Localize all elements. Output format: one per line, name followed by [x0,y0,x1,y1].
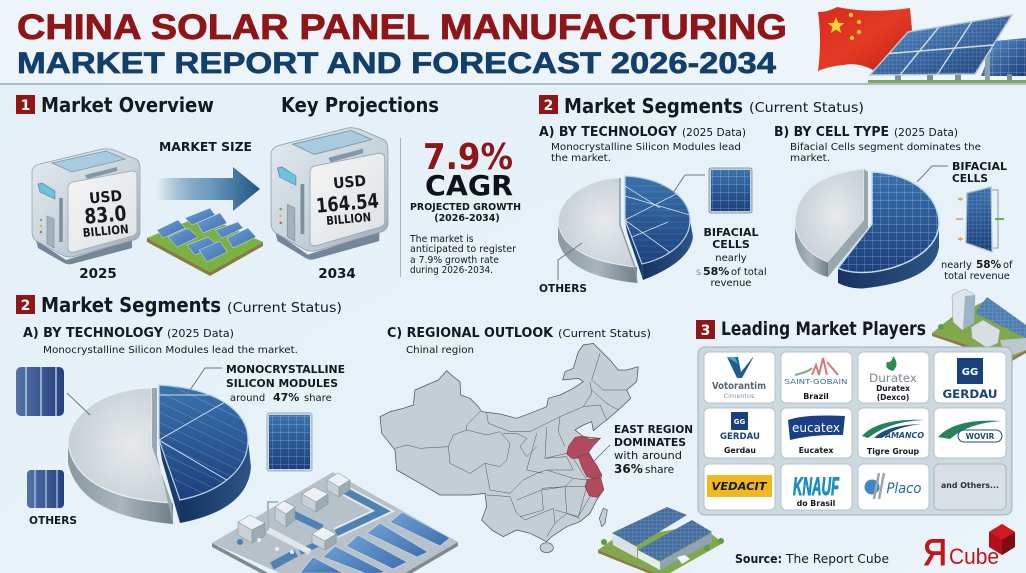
callout: nearly 58%: 58% [976,259,1002,271]
icon: storage device 2025 [32,149,140,264]
panel: leading market players [696,289,1026,515]
label: market size: MARKET SIZE [159,139,252,154]
card: votorantim: Cimentos [724,392,755,400]
subheading: by technology: Monocrystalline Silicon Modules lead [551,142,741,153]
label: usd 83.0 billion [82,187,129,240]
label: 2034: 2034 [318,266,356,282]
stat: 7.9% cagr [410,137,521,224]
card: gerdau [934,352,1006,403]
panel: market overview [16,93,263,282]
callout: monocrystalline share: 47% [273,391,299,404]
pie chart: by cell type [795,169,939,288]
subheading: by cell type: market. [790,153,830,164]
source: The Report Cube [785,552,889,566]
stat: 7.9% cagr: 7.9% [423,137,513,178]
pie chart: by technology lower [68,382,260,524]
icon: china flag [818,7,912,71]
label: 2025: 2025 [79,266,117,282]
panel: by cell type [774,125,1013,288]
arrow: growth [157,167,260,211]
label: usd 164.54 billion: USD [332,172,367,192]
card: knauf: do Brasil [797,499,836,508]
heading: key projections: Key Projections [281,93,439,117]
leader: monocrystalline [188,368,222,393]
callout: east region: 36% [614,462,643,476]
illustration: warehouse [598,507,724,573]
label: usd 83.0 billion: BILLION [82,222,129,240]
icon: module panel lower [267,413,312,471]
stat: 7.9% cagr: PROJECTED GROWTH [410,202,521,213]
text: growth note [409,234,516,276]
subheading: by technology: (2025 Data) [682,126,746,139]
title: CHINA SOLAR PANEL MANUFACTURING [17,8,787,47]
logo: rcube: Cube [949,544,999,569]
icon: bifacial panel with arrows [956,187,1004,252]
card: eucatex: Eucatex [799,446,833,455]
label: usd 83.0 billion: USD [88,187,123,207]
heading: market segments [539,94,864,118]
subheading: by technology: Monocrystalline Silicon Modules lead the market. [43,345,298,356]
callout: east region: EAST REGION [614,424,693,436]
subheading: by technology [23,326,298,356]
card: duratex [858,352,929,403]
heading: market segments: Market Segments [564,94,743,118]
label: usd 83.0 billion: 83.0 [83,201,127,229]
logo: rcube [923,524,1015,573]
subheading: regional outlook [387,326,651,356]
panel: key projections [271,93,521,282]
icon: cell large [16,367,64,416]
text: growth note: during 2026-2034. [410,265,493,276]
card: amanco [858,408,929,458]
callout: east region [614,424,693,476]
icon: module panel [709,168,752,213]
logo: rcube: Я [923,532,947,573]
subheading: by cell type: Bifacial Cells segment dominates the [790,142,981,153]
heading: market segments: 2 [21,298,30,314]
card: and others: and Others... [941,481,999,490]
icon: cell small [27,470,64,508]
heading: leading market players: 3 [701,323,710,339]
subheading: regional outlook: Chinal region [406,345,474,356]
callout: nearly 58%: of [1003,260,1013,271]
title: MARKET REPORT AND FORECAST 2026-2034 [17,47,776,80]
callout: monocrystalline share: share [304,393,332,404]
card: votorantim [704,352,775,403]
text: growth note: a 7.9% growth rate [410,255,499,266]
card: placo: Placo [886,481,922,497]
source: Source: [735,552,782,566]
card: amanco: Tigre Group [867,447,919,456]
card: saint-gobain: Brazil [803,392,829,401]
title [17,8,787,80]
callout: bifacial cells: 58% [703,265,729,278]
heading: market overview: 1 [21,98,30,114]
logo grid [698,347,1012,515]
card: knauf: KNAUF [793,473,839,501]
callout: monocrystalline share: around [230,393,265,404]
callout: bifacial cells: BIFACIAL [704,226,758,239]
heading: market segments [16,293,342,317]
label: others: OTHERS [29,515,77,527]
card: saint-gobain: SAINT-GOBAIN [784,377,848,386]
text: growth note: The market is [409,234,474,245]
pie chart: by technology [558,176,695,283]
subheading: regional outlook: (Current Status) [558,327,651,340]
stat: 7.9% cagr: CAGR [425,169,513,202]
callout: east region: with around [614,450,682,462]
leader: others [67,393,90,415]
leader: module [673,175,705,193]
card: vedacit [704,464,775,510]
callout: nearly 58%: total revenue [944,271,1010,282]
callout: bifacial cells: of total [731,267,767,278]
card: saint-gobain [781,352,852,403]
source [735,552,889,566]
icon: storage device 2034 [271,128,388,260]
subheading: by technology: A) BY TECHNOLOGY [539,125,678,140]
icon: solar array header [868,15,1026,83]
subheading: by cell type: (2025 Data) [894,126,958,139]
card: duratex: (Dexco) [877,393,909,402]
illustration: factory floor [212,472,458,573]
card: eucatex [781,408,852,458]
panel: market segments upper [539,94,864,295]
label: usd 164.54 billion: 164.54 [315,188,380,218]
card: knauf [781,464,852,510]
card: gerdau small: Gerdau [724,446,756,455]
subheading: regional outlook: C) REGIONAL OUTLOOK [387,326,554,341]
subheading: by cell type [774,125,981,164]
callout: monocrystalline share: SILICON MODULES [226,378,338,390]
callout: bifacial cells [696,226,767,289]
callout: bifacial cells: s [696,267,701,278]
card: gerdau: GERDAU [942,387,998,401]
heading: market segments: Market Segments [41,293,221,317]
leader: bifacial [917,166,948,182]
label: others: OTHERS [539,283,587,295]
card: wovir [934,408,1006,458]
heading: market segments: (Current Status) [749,101,864,116]
map: china [380,343,638,553]
illustration: building top right [932,289,1026,366]
text: growth note: anticipated to register [410,244,516,255]
subheading: by technology: A) BY TECHNOLOGY [23,326,164,341]
card: wovir: WOVIR [966,432,995,441]
callout: nearly 58% [941,259,1013,282]
card: eucatex: eucatex [792,421,840,435]
card: gerdau small: GERDAU [720,432,760,442]
callout: bifacial cells: revenue [711,278,751,289]
card: votorantim: Votorantim [712,381,766,392]
card: duratex: Duratex [869,371,917,385]
panel: regional outlook [380,326,693,553]
icon: solar field [147,208,263,276]
callout: bifacial cells: CELLS [712,238,750,251]
card: gerdau small [704,408,775,458]
callout: monocrystalline share [226,364,345,404]
callout: monocrystalline share: MONOCRYSTALLINE [226,364,345,376]
callout: nearly 58%: nearly [941,260,972,271]
subheading: by technology: the market. [551,153,611,164]
callout: east region: DOMINATES [614,437,686,449]
card: gerdau: GG [962,367,978,378]
card: gerdau small: GG [734,418,745,426]
label: usd 164.54 billion [315,172,380,228]
subheading: by technology: (2025 Data) [167,327,234,340]
heading: leading market players: Leading Market Players [721,318,926,340]
label: bifacial cells: CELLS [952,173,988,185]
card: placo [858,464,929,510]
subheading: by cell type: B) BY CELL TYPE [774,125,889,140]
card: duratex: Duratex [876,384,910,393]
label: usd 164.54 billion: BILLION [326,210,372,228]
panel: market segments lower [16,293,345,527]
label: bifacial cells [952,161,1007,185]
heading: market segments: (Current Status) [227,301,342,316]
subheading: by technology [539,125,746,164]
heading: market overview: Market Overview [41,93,214,117]
label: bifacial cells: BIFACIAL [952,161,1007,173]
label: others [539,243,587,295]
card: and others [934,464,1006,510]
heading: market segments: 2 [544,98,553,114]
stat: 7.9% cagr: (2026-2034) [434,213,500,224]
callout: bifacial cells: nearly [715,253,747,264]
card: amanco: AMANCO [884,431,925,440]
card: vedacit: VEDACIT [712,480,768,493]
callout: east region: share [645,464,674,476]
